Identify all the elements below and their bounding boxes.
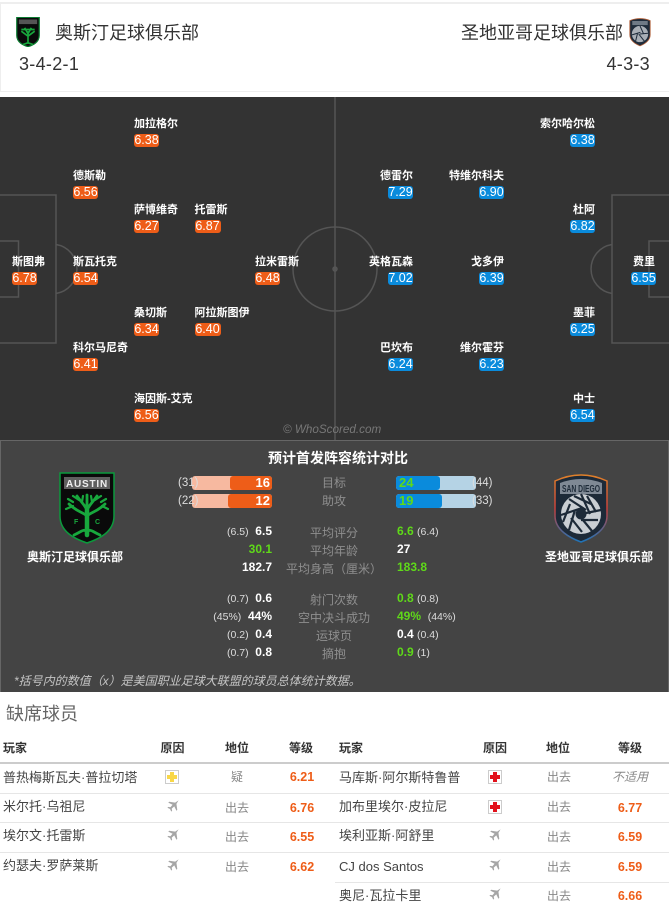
- stat row: average age: 30.1: [249, 542, 272, 556]
- bar value: 19: [399, 493, 413, 508]
- player: 拉米雷斯: 拉米雷斯: [255, 256, 299, 268]
- icon: plane: [167, 800, 179, 812]
- table header: 原因: [160, 741, 185, 755]
- player: 萨博维奇: 6.27: [134, 219, 159, 233]
- player: 阿拉斯图伊: 6.40: [195, 322, 220, 336]
- row: 马库斯·阿尔斯特鲁普: 出去: [547, 770, 571, 784]
- player: 维尔霍芬: [460, 342, 504, 371]
- season assists value: (33): [472, 495, 492, 507]
- player: 索尔哈尔松: 6.38: [570, 133, 595, 147]
- row: CJ dos Santos: 出去: [547, 860, 571, 874]
- stat row: shots: (0.7) 0.6: [227, 591, 272, 605]
- table header: 地位: [225, 741, 249, 755]
- table header: 玩家: [3, 741, 27, 755]
- row: 奥尼·瓦拉卡里: [335, 882, 669, 911]
- bar value: [230, 476, 272, 490]
- bar value: [228, 494, 272, 508]
- player: 维尔霍芬: 6.23: [479, 357, 504, 371]
- table header: [0, 738, 335, 764]
- stat row: average height: 183.8: [397, 560, 427, 574]
- player: 巴坎布: 6.24: [388, 357, 413, 371]
- icon: injury cross: [488, 800, 502, 814]
- player: 维尔霍芬: 维尔霍芬: [460, 342, 504, 354]
- header panel: [0, 2, 669, 92]
- player: 费里: 6.55: [631, 271, 656, 285]
- player: 斯图弗: [12, 256, 45, 285]
- table header: 地位: [546, 741, 570, 755]
- bar value: [396, 476, 440, 490]
- footnote: *括号内的数值（x）是美国职业足球大联盟的球员总体统计数据。: [14, 674, 361, 688]
- icon: plane: [489, 859, 501, 871]
- panel: lineup statistics comparison: [0, 440, 669, 692]
- player: 索尔哈尔松: [540, 118, 595, 147]
- player: 拉米雷斯: [255, 256, 299, 285]
- player: 特维尔科夫: 特维尔科夫: [449, 170, 504, 182]
- row: 米尔托·乌祖尼: 出去: [225, 801, 249, 815]
- away team name: 圣地亚哥足球俱乐部: [461, 23, 623, 43]
- player: 墨菲: [570, 306, 595, 336]
- row: 埃利亚斯·阿舒里: 出去: [547, 830, 571, 844]
- row: CJ dos Santos: CJ dos Santos: [339, 859, 424, 874]
- player: 特维尔科夫: 6.90: [479, 185, 504, 199]
- player: 海因斯-艾克: 海因斯-艾克: [134, 393, 193, 405]
- player: 中士: [570, 392, 595, 422]
- stat row: shots: [227, 591, 439, 607]
- stat row: shots: 射门次数: [310, 593, 358, 607]
- row: 普热梅斯瓦夫·普拉切塔: 疑: [231, 770, 243, 784]
- row: 埃尔文·托雷斯: 埃尔文·托雷斯: [3, 828, 85, 843]
- player: 斯瓦托克: 斯瓦托克: [73, 256, 117, 268]
- player: 萨博维奇: [134, 204, 178, 233]
- player: 加拉格尔: 加拉格尔: [134, 118, 178, 130]
- season goals value: (44): [472, 477, 492, 489]
- player: 德雷尔: 德雷尔: [380, 170, 413, 182]
- pitch markings: [0, 97, 669, 440]
- home team header: [16, 17, 199, 74]
- stats heading: 预计首发阵容统计对比: [268, 450, 408, 466]
- row: 马库斯·阿尔斯特鲁普: [335, 764, 669, 793]
- stat row: shots: 0.8 (0.8): [397, 591, 439, 605]
- season assists value: (22): [178, 495, 198, 507]
- icon: injury cross: [488, 770, 502, 784]
- stat row: average height: 182.7: [242, 560, 272, 574]
- bar track: [396, 476, 476, 490]
- icon: Austin crest: C: [95, 519, 100, 526]
- watermark: © WhoScored.com: [283, 423, 381, 436]
- bar track: [192, 476, 272, 490]
- stat row: average rating: [227, 524, 439, 540]
- player: 杜阿: 6.82: [570, 219, 595, 233]
- stat row: dribbles: 运球页: [316, 629, 352, 643]
- player: 中士: 6.54: [570, 408, 595, 422]
- icon: Austin crest: F: [74, 519, 79, 526]
- icon: doubtful cross: [165, 770, 179, 784]
- row: 约瑟夫·罗萨莱斯: [0, 852, 335, 881]
- player: 阿拉斯图伊: 阿拉斯图伊: [194, 307, 250, 319]
- stat row: average rating: 平均评分: [310, 526, 358, 540]
- icon: San Diego crest small: [629, 18, 651, 46]
- bar value: 16: [256, 475, 270, 490]
- icon: plane: [489, 888, 501, 900]
- player: 索尔哈尔松: 索尔哈尔松: [540, 118, 595, 130]
- bar value: [396, 494, 442, 508]
- table header: 玩家: [339, 741, 363, 755]
- table header: 等级: [618, 741, 642, 755]
- stat row: aerial duels: 空中决斗成功: [298, 611, 370, 625]
- icon: Austin crest: AUSTIN: [66, 479, 108, 490]
- player: 费里: [631, 256, 656, 285]
- player: 费里: 费里: [633, 256, 655, 268]
- row: 加布里埃尔·皮拉尼: 加布里埃尔·皮拉尼: [339, 799, 447, 814]
- player: 加拉格尔: [134, 118, 178, 147]
- panel: pitch: [0, 97, 669, 440]
- row: 埃利亚斯·阿舒里: 埃利亚斯·阿舒里: [339, 828, 434, 843]
- home team name: 奥斯汀足球俱乐部: [55, 23, 199, 43]
- player: 托雷斯: 6.87: [195, 219, 220, 233]
- player: 德雷尔: 7.29: [388, 185, 413, 199]
- player: 桑切斯: 6.34: [134, 322, 159, 336]
- stat row: tackles: [0, 644, 669, 662]
- player: 托雷斯: 托雷斯: [194, 204, 228, 216]
- missing players heading: 缺席球员: [6, 704, 78, 724]
- row: 米尔托·乌祖尼: 米尔托·乌祖尼: [3, 799, 85, 814]
- home bar: assists: [178, 493, 272, 508]
- player: 阿拉斯图伊: [194, 306, 250, 336]
- player: 特维尔科夫: [449, 170, 504, 199]
- stat row: average age: 27: [397, 542, 410, 556]
- player: 托雷斯: [194, 204, 228, 233]
- away players: [369, 118, 656, 422]
- row: 马库斯·阿尔斯特鲁普: 马库斯·阿尔斯特鲁普: [339, 770, 460, 785]
- away bar: goals: [396, 475, 492, 490]
- row: 约瑟夫·罗萨莱斯: 出去: [225, 860, 249, 874]
- player: 戈多伊: 戈多伊: [471, 256, 504, 268]
- stat row: tackles: 摘抱: [322, 647, 346, 661]
- home bar: goals: [178, 475, 272, 490]
- table: away missing players: [335, 738, 669, 908]
- player: 斯图弗: 斯图弗: [12, 256, 45, 268]
- stat row: average rating: 6.6 (6.4): [397, 524, 439, 538]
- stat row: average height: 平均身高（厘米）: [286, 562, 382, 576]
- icon: San Diego crest: [554, 474, 608, 543]
- player: 德斯勒: 德斯勒: [73, 170, 106, 182]
- row: 米尔托·乌祖尼: [0, 793, 335, 822]
- player: 萨博维奇: 萨博维奇: [134, 204, 178, 216]
- stat row: aerial duels: (45%) 44%: [213, 609, 272, 623]
- table: home missing players: [0, 738, 335, 873]
- row: 埃尔文·托雷斯: 出去: [225, 830, 249, 844]
- table header: [335, 738, 669, 764]
- stat row: tackles: (0.7) 0.8: [227, 645, 272, 659]
- player: 德斯勒: 6.56: [73, 185, 98, 199]
- player: 桑切斯: [134, 306, 167, 336]
- row: 马库斯·阿尔斯特鲁普: 不适用: [612, 770, 648, 784]
- home team label: 奥斯汀足球俱乐部: [27, 550, 123, 564]
- bar track: [396, 494, 476, 508]
- stat row: average height: [242, 560, 427, 576]
- player: 戈多伊: 6.39: [479, 271, 504, 285]
- player: 杜阿: [570, 204, 595, 233]
- player: 中士: 中士: [573, 393, 595, 405]
- player: 斯瓦托克: 6.54: [73, 271, 98, 285]
- player: 桑切斯: 桑切斯: [134, 307, 167, 319]
- player: 巴坎布: [380, 342, 413, 371]
- player: 英格瓦森: 英格瓦森: [369, 256, 413, 268]
- bar value: 12: [256, 493, 270, 508]
- row: 加布里埃尔·皮拉尼: [335, 793, 669, 822]
- row: 加布里埃尔·皮拉尼: 出去: [547, 800, 571, 814]
- player: 科尔马尼奇: [73, 342, 128, 371]
- player: 巴坎布: 巴坎布: [380, 342, 413, 354]
- player: 拉米雷斯: 6.48: [255, 271, 280, 285]
- icon: Austin crest: [59, 472, 115, 544]
- row: 约瑟夫·罗萨莱斯: 约瑟夫·罗萨莱斯: [3, 858, 98, 873]
- icon: Austin crest small: [16, 17, 40, 47]
- icon: plane: [167, 859, 179, 871]
- icon: plane: [167, 829, 179, 841]
- home players: [12, 118, 299, 422]
- table header: 等级: [289, 741, 313, 755]
- stat row: dribbles: 0.4 (0.4): [397, 627, 439, 641]
- stat row: tackles: 0.9 (1): [397, 645, 430, 659]
- bar value: 24: [399, 475, 413, 490]
- row: 约瑟夫·罗萨莱斯: 6.62: [290, 860, 314, 874]
- row: 埃利亚斯·阿舒里: 6.59: [618, 830, 642, 844]
- player: 科尔马尼奇: 6.41: [73, 357, 98, 371]
- stat label: assists: 助攻: [322, 494, 346, 508]
- player: 德雷尔: [380, 170, 413, 199]
- row: 奥尼·瓦拉卡里: 奥尼·瓦拉卡里: [339, 888, 421, 903]
- season goals value: (31): [178, 477, 198, 489]
- player: 墨菲: 6.25: [570, 322, 595, 336]
- stat row: average age: 平均年龄: [310, 544, 358, 558]
- away team header: [461, 18, 651, 74]
- player: 英格瓦森: 7.02: [388, 271, 413, 285]
- home formation: 3-4-2-1: [19, 54, 79, 74]
- row: 奥尼·瓦拉卡里: 出去: [547, 889, 571, 903]
- stat row: dribbles: [0, 626, 669, 644]
- away team label: 圣地亚哥足球俱乐部: [545, 550, 653, 564]
- away formation: 4-3-3: [606, 54, 650, 74]
- row: 奥尼·瓦拉卡里: 6.66: [618, 889, 642, 903]
- stat row: average age: [248, 542, 410, 558]
- player: 英格瓦森: [369, 256, 413, 285]
- row: 埃尔文·托雷斯: [0, 822, 335, 851]
- row: CJ dos Santos: [335, 852, 669, 882]
- bar track: [192, 494, 272, 508]
- away bar: assists: [396, 493, 492, 508]
- player: 加拉格尔: 6.38: [134, 133, 159, 147]
- row: CJ dos Santos: 6.59: [618, 860, 642, 874]
- player: 科尔马尼奇: 科尔马尼奇: [73, 342, 128, 354]
- player: 戈多伊: [471, 256, 504, 285]
- table header: 原因: [483, 741, 507, 755]
- stat row: aerial duels: 49% (44%): [397, 609, 456, 623]
- player: 德斯勒: [73, 170, 106, 199]
- stat label: goals: 目标: [322, 476, 346, 490]
- player: 墨菲: 墨菲: [573, 307, 595, 319]
- player: 斯瓦托克: [73, 256, 117, 285]
- stat row: dribbles: (0.2) 0.4: [227, 627, 272, 641]
- player: 海因斯-艾克: 6.56: [134, 408, 159, 422]
- stat row: aerial duels: [213, 609, 456, 625]
- player: 海因斯-艾克: [134, 392, 193, 422]
- icon: plane: [489, 829, 501, 841]
- row: 加布里埃尔·皮拉尼: 6.77: [618, 801, 642, 815]
- stat row: average rating: (6.5) 6.5: [227, 524, 272, 538]
- row: 埃尔文·托雷斯: 6.55: [290, 830, 314, 844]
- row: 普热梅斯瓦夫·普拉切塔: [0, 764, 335, 793]
- row: 埃利亚斯·阿舒里: [335, 822, 669, 851]
- player: 杜阿: 杜阿: [573, 204, 595, 216]
- row: 普热梅斯瓦夫·普拉切塔: 6.21: [290, 770, 314, 784]
- row: 普热梅斯瓦夫·普拉切塔: 普热梅斯瓦夫·普拉切塔: [3, 770, 137, 785]
- row: 米尔托·乌祖尼: 6.76: [290, 801, 314, 815]
- player: 斯图弗: 6.78: [12, 271, 37, 285]
